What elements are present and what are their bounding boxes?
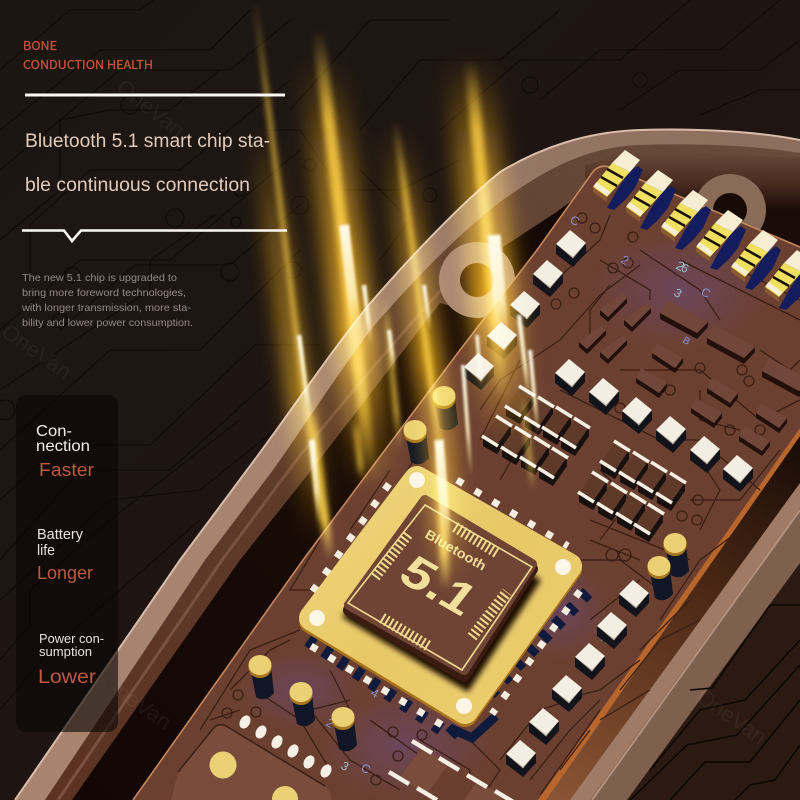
chip label 5.1: 5.1: [390, 546, 488, 625]
blue board markings: 3: [338, 758, 352, 774]
board traces: [200, 215, 800, 800]
lower right shell layers: [535, 425, 800, 800]
panel: key benefits: [16, 395, 118, 732]
battery benefit: [37, 527, 93, 583]
white square components: [464, 230, 753, 777]
surface-mount chips: [579, 293, 800, 456]
connection benefit: nection: [36, 438, 90, 455]
board pads: [222, 213, 765, 785]
blue board markings: C: [568, 212, 582, 229]
wide glow: [262, 60, 508, 580]
description text: bility and lower power consumption.: [22, 317, 193, 329]
gold plate: [309, 472, 571, 714]
circuit board: [133, 150, 800, 800]
power benefit: [38, 631, 104, 688]
main title: ble continuous connection: [25, 175, 250, 196]
blue board markings: C: [698, 284, 713, 301]
blue board markings: 3: [672, 285, 685, 301]
main title: [25, 131, 270, 196]
watermarks: OneVan: [97, 669, 176, 734]
blue board markings: B: [680, 335, 692, 348]
blue board markings: 4: [368, 685, 382, 701]
power benefit: sumption: [39, 644, 92, 659]
bottom module with pins: [170, 713, 334, 800]
blue board markings: S: [658, 573, 670, 586]
power benefit: Lower: [38, 666, 97, 688]
golden light beams: [255, 0, 538, 590]
chip pins: [305, 480, 580, 725]
blue board markings: [324, 212, 713, 777]
Bluetooth 5.1 chip: [305, 472, 590, 738]
chip label Bluetooth: Bluetooth: [422, 527, 489, 574]
description text: The new 5.1 chip is upgraded to: [22, 272, 177, 284]
watermarks: OneVan: [112, 74, 190, 143]
description text: with longer transmission, more sta-: [21, 302, 192, 314]
blue board markings: 6: [338, 727, 350, 741]
gold connector contacts: [593, 150, 800, 310]
blue board markings: 2: [618, 252, 632, 268]
power benefit: Power con-: [39, 631, 104, 646]
chip die: [342, 500, 541, 692]
connection benefit: [36, 423, 94, 480]
resistor arrays: [482, 386, 686, 542]
battery benefit: Battery: [37, 527, 84, 543]
watermarks: OneVan: [692, 684, 771, 749]
mounting rings: [439, 174, 766, 318]
lower resistors: [389, 741, 515, 800]
notched divider: [22, 230, 287, 241]
main title: Bluetooth 5.1 smart chip sta-: [25, 131, 270, 152]
capacitors: [248, 386, 689, 751]
heading label: CONDUCTION HEALTH: [23, 56, 153, 73]
heading label: BONE: [23, 37, 57, 54]
blue board markings: 6: [678, 260, 692, 276]
top divider: [25, 94, 285, 96]
bright cores: [299, 225, 538, 545]
violet glow patches: [240, 230, 770, 800]
heading label: [23, 37, 153, 73]
blue board markings: C: [358, 760, 373, 777]
blue board markings: H: [598, 632, 611, 647]
description text: [21, 272, 193, 329]
battery benefit: life: [37, 543, 55, 559]
connection benefit: Faster: [39, 460, 94, 480]
battery benefit: Longer: [37, 563, 93, 583]
medium beams: [255, 0, 533, 590]
description text: bring more foreword technologies,: [22, 287, 186, 299]
blue board markings: 2: [324, 715, 337, 731]
chip pin shadows: [308, 590, 590, 738]
blue board markings: 2: [674, 258, 687, 274]
connection benefit: Con-: [36, 423, 72, 440]
